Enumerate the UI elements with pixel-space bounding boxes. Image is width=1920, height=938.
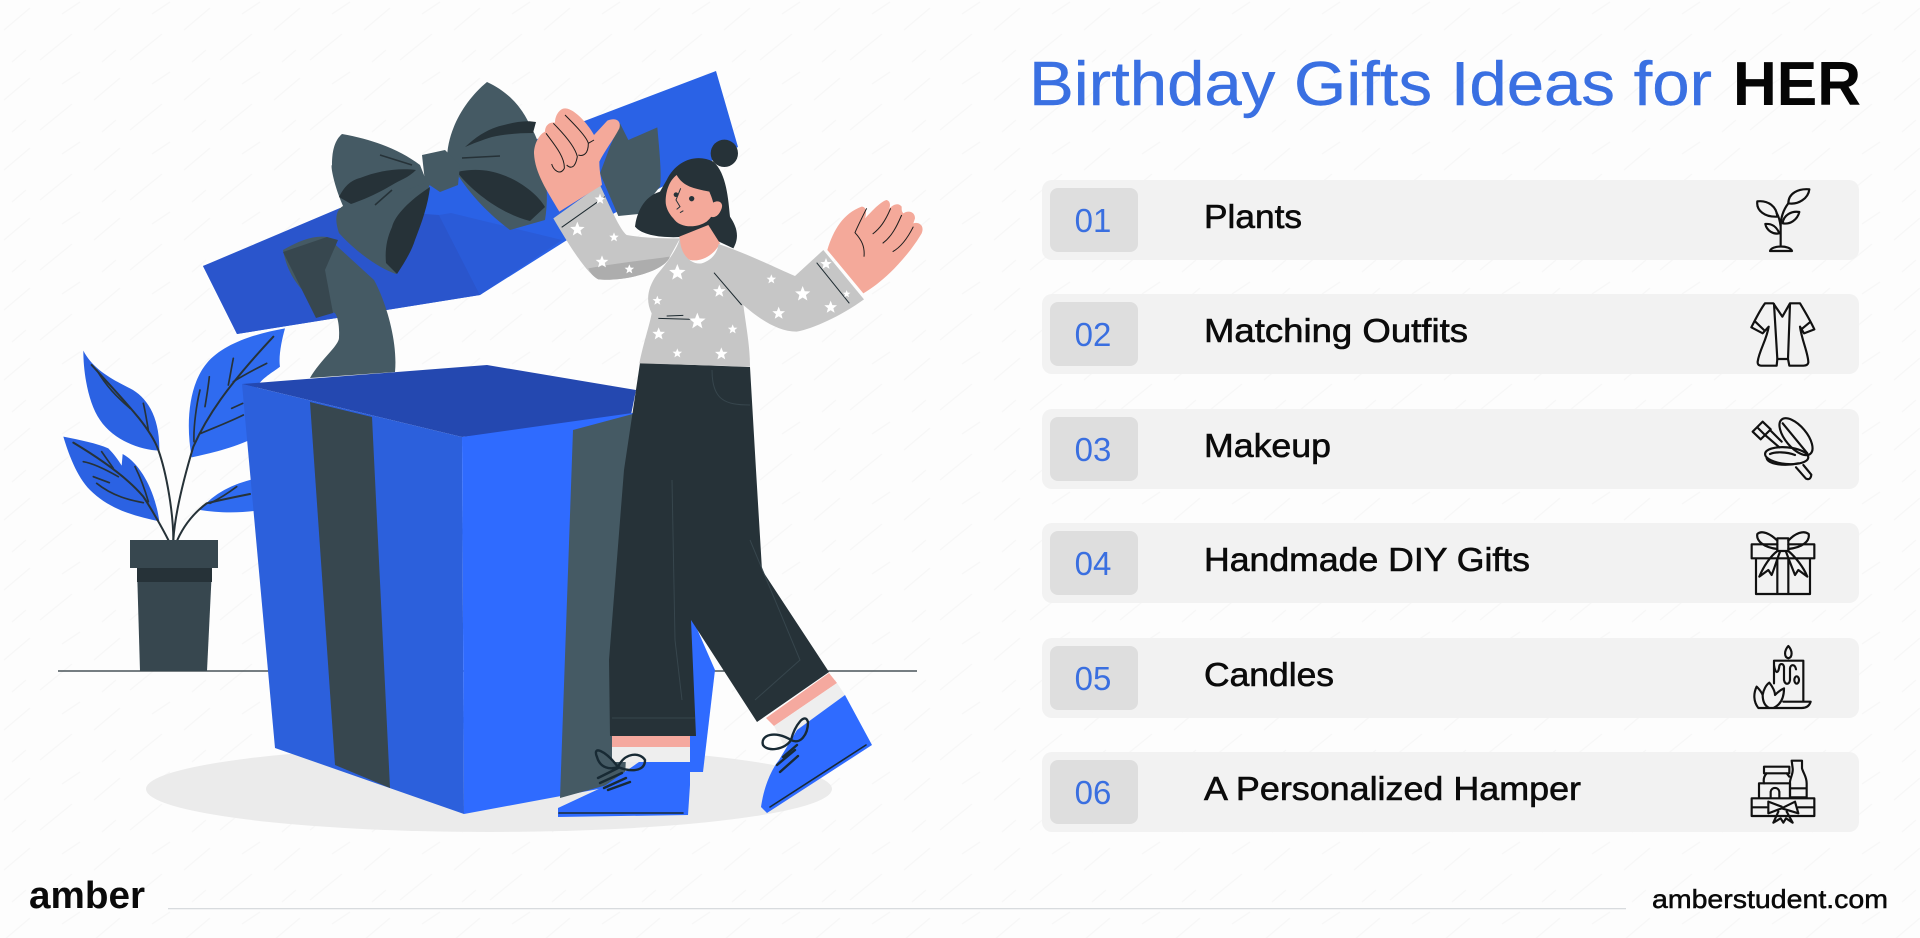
gift box lid	[203, 71, 738, 334]
ribbon streamer	[283, 237, 395, 378]
neck	[679, 225, 720, 260]
panel: item 05	[1042, 638, 1859, 718]
trousers	[609, 363, 829, 736]
hair	[635, 140, 738, 248]
title: Birthday Gifts Ideas for	[1029, 50, 1712, 119]
pot	[130, 540, 218, 671]
left shoe	[558, 762, 690, 817]
panel: item 04: Handmade DIY Gifts	[1204, 541, 1530, 578]
icon: candle and lotus	[1754, 646, 1811, 708]
box left face	[242, 384, 464, 814]
floor shadow	[146, 746, 832, 832]
panel: item 02: Matching Outfits	[1204, 312, 1468, 349]
stars	[570, 194, 850, 359]
panel: item 06	[1042, 752, 1859, 832]
icon: sprout	[1757, 189, 1809, 251]
gift box	[242, 365, 640, 814]
panel: item 04	[1042, 523, 1859, 603]
icon: potted plant	[63, 328, 285, 671]
woman	[534, 108, 923, 817]
panel: item 03: 03	[1075, 431, 1111, 468]
panel: item 02	[1042, 294, 1859, 374]
icon: hamper	[1752, 761, 1814, 823]
panel: item 02: 02	[1075, 316, 1111, 353]
panel: item 06: 06	[1075, 774, 1111, 811]
panel: item 01: Plants	[1204, 198, 1302, 235]
right shoe	[761, 695, 872, 813]
box front face	[462, 412, 640, 814]
upper body	[534, 108, 923, 367]
footer logo: amber	[29, 875, 145, 917]
panel: item 06: A Personalized Hamper	[1204, 770, 1581, 807]
ear	[710, 201, 722, 217]
left sleeve	[553, 185, 680, 280]
ground line	[58, 670, 917, 672]
trouser seams	[612, 370, 800, 718]
shirt lines	[562, 197, 849, 319]
open hand	[827, 200, 923, 293]
footer rule	[168, 908, 1626, 910]
icon: compact and brush	[1753, 413, 1819, 479]
footer website: amberstudent.com	[1652, 884, 1888, 914]
panel: item 05: 05	[1075, 660, 1111, 697]
panel: item 03: Makeup	[1204, 427, 1331, 464]
ribbon behind head	[600, 123, 661, 216]
bow	[332, 82, 547, 274]
title: HER	[1733, 50, 1861, 119]
face	[666, 175, 714, 226]
eyes	[674, 192, 694, 201]
plant leaves	[63, 328, 285, 540]
panel: item 05: Candles	[1204, 656, 1334, 693]
icon: gift box	[1752, 532, 1814, 594]
vertical ribbon left	[310, 402, 390, 788]
panel: item 01	[1042, 180, 1859, 260]
socks	[612, 673, 845, 762]
raised hand	[534, 108, 620, 212]
sleeve shadow	[588, 257, 670, 280]
panel: item 04: 04	[1075, 545, 1111, 582]
ribbon shade on lid	[283, 237, 338, 318]
panel: item 01: 01	[1075, 202, 1111, 239]
torso and right sleeve	[639, 238, 864, 367]
vertical ribbon right	[560, 412, 640, 798]
panel: item 03	[1042, 409, 1859, 489]
box inside	[242, 365, 636, 437]
face details	[676, 188, 683, 213]
shoe laces	[559, 718, 866, 813]
icon: robe	[1751, 303, 1814, 366]
box right back panel	[680, 590, 715, 772]
